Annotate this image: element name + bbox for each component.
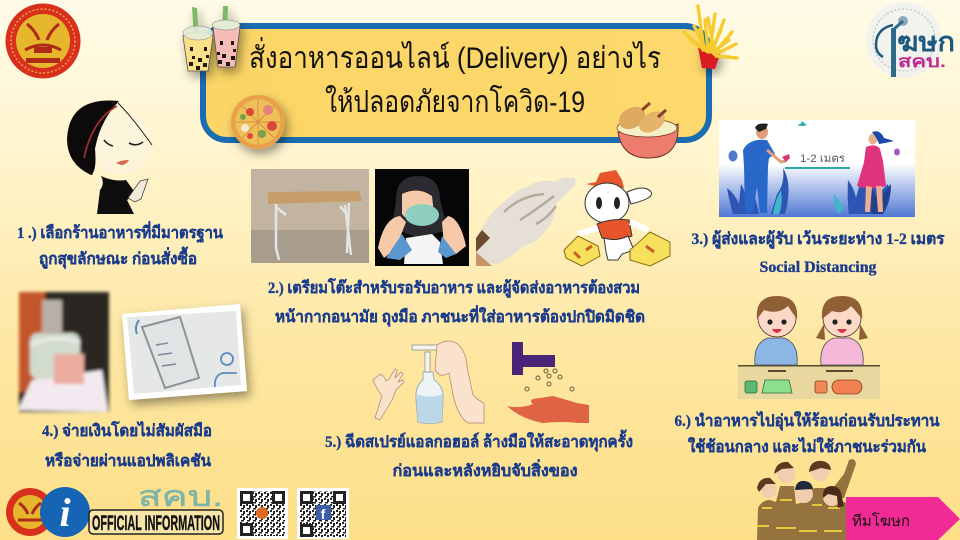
official information badge [89,510,223,535]
photo: money in plastic bag [18,292,109,412]
text: step 3: 3.) ผู้ส่งและผู้รับ เว้นระยะห่าง 1-2 เมตร [692,230,945,250]
logo: spokesperson microphone: ฆษก [897,27,955,57]
QR code: facebook [297,488,349,539]
title panel [203,26,709,140]
man in blue [743,124,790,213]
illustration: tap and washing hand [507,342,589,423]
distance label [785,153,850,169]
balloons [728,121,900,162]
plants [727,168,891,214]
title text: ให้ปลอดภัยจากโควิด-19 [325,84,585,119]
text: step 5: 5.) ฉีดสเปรย์แอลกอฮอล์ ล้างมือให้สะอาดทุกครั้ง [325,429,633,452]
illustration: cashless payment card [122,304,247,400]
QR code: facebook: f [321,506,326,522]
girl [816,296,868,365]
illustration: woman putting on mask [375,169,469,266]
icon: information [40,487,90,537]
illustration: woman with phone [67,100,152,214]
photo: folding table [251,169,369,263]
illustration: children at table [738,296,880,399]
text: step 3: Social Distancing [760,259,876,276]
text: step 1: 1 .) เลือกร้านอาหารที่มีมาตรฐาน [17,221,223,243]
official information badge: OFFICIAL INFORMATION [92,512,220,535]
text: step 4: หรือจ่ายผ่านแอปพลิเคชัน [45,452,211,470]
text: step 6: 6.) นำอาหารไปอุ่นให้ร้อนก่อนรับประทาน [674,411,940,431]
illustration: delivery rabbit [564,170,670,266]
text: step 2: 2.) เตรียมโต๊ะสำหรับรอรับอาหาร และผู้จัดส่งอาหารต้องสวม [268,277,640,299]
photo: latex gloves [476,178,576,266]
icon: french fries [684,6,737,69]
woman in pink [857,131,894,212]
text: step 1 [17,221,223,270]
icon: bubble tea cups [183,6,240,71]
text: step 3 [692,230,945,276]
logo: spokesperson microphone: สคบ. [898,52,946,71]
logo: OCPB teal wordmark: สคบ. [138,481,223,513]
bottom seal [6,488,54,536]
illustration: social distancing 1-2 metres [719,120,915,217]
arrow tag: spokesperson team: ทีมโฆษก [852,512,910,530]
title text [249,37,661,119]
text: step 4: 4.) จ่ายเงินโดยไม่สัมผัสมือ [42,420,212,440]
icon: pizza [231,95,285,149]
icon: information: i [59,490,71,535]
tableware [745,370,862,394]
text: step 6: ใช้ช้อนกลาง และไม่ใช้ภาชนะร่วมกัน [688,437,926,456]
text: step 5 [325,429,633,480]
text: step 6 [674,411,940,456]
emblem: top left seal [6,4,80,78]
text: step 5: ก่อนและหลังหยิบจับสิ่งของ [392,459,578,480]
icon: tempura bowl [615,102,678,158]
illustration: spokesperson team [757,459,856,540]
distance label: 1-2 เมตร [800,153,845,165]
boy [755,296,797,365]
title text: สั่งอาหารออนไลน์ (Delivery) อย่างไร [249,37,661,75]
text: step 1: ถูกสุขลักษณะ ก่อนสั่งซื้อ [39,246,197,270]
text: step 2 [268,277,645,327]
logo: spokesperson microphone [866,2,955,78]
text: step 4 [42,420,212,470]
illustration: sanitizer spray on hands [373,341,484,424]
arrow tag: spokesperson team [846,497,960,540]
QR code: website [237,488,288,539]
text: step 2: หน้ากากอนามัย ถุงมือ ภาชนะที่ใส่อาหารต้องปกปิดมิดชิด [275,305,645,327]
